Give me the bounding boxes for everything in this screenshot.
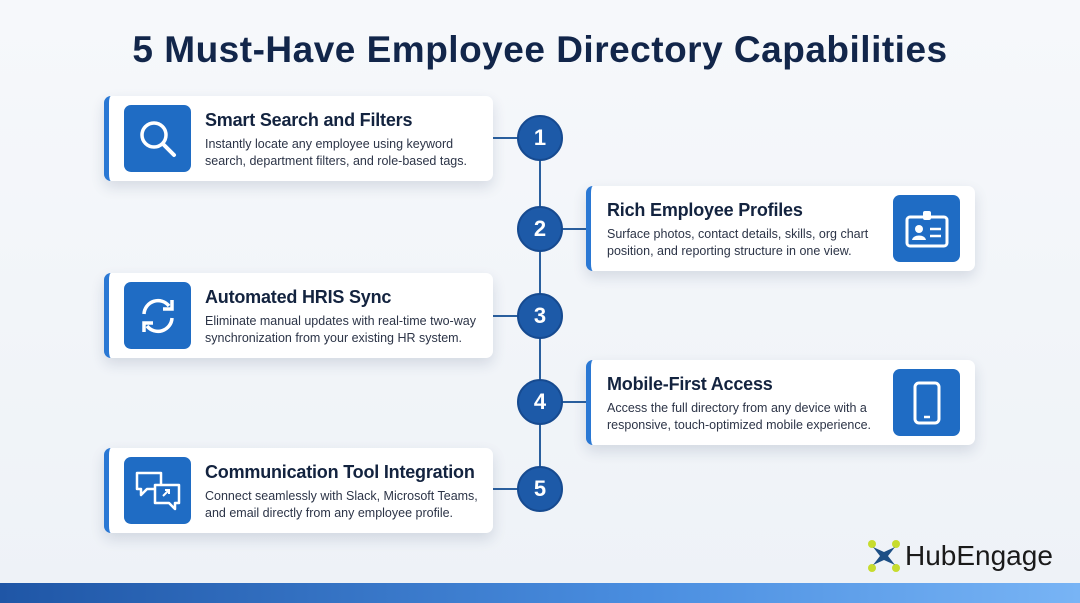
- card 2: rich profiles: position, and reporting structure in one view.: [607, 244, 852, 258]
- card 1: smart search: Instantly locate any employee using keyword: [205, 137, 453, 151]
- step number 1: [517, 115, 563, 161]
- step number 2: 2: [534, 216, 546, 241]
- card 4: mobile first: Mobile-First Access: [607, 374, 773, 394]
- card 1: smart search: [104, 96, 493, 181]
- step number 3: 3: [534, 303, 546, 328]
- card 4: mobile first: responsive, touch-optimized mobile experience.: [607, 418, 871, 432]
- card 1: smart search: search, department filters, and role-based tags.: [205, 154, 467, 168]
- step number 2: [517, 206, 563, 252]
- card 4: mobile first: Access the full directory from any device with a: [607, 401, 867, 415]
- card 1: smart search: Smart Search and Filters: [205, 110, 412, 130]
- step number 5: [517, 466, 563, 512]
- logo: HubEngage: HubEngage: [905, 540, 1053, 571]
- card 2: rich profiles: [586, 186, 975, 271]
- card 3: HRIS sync: synchronization from your existing HR system.: [205, 331, 462, 345]
- card 3: HRIS sync: [104, 273, 493, 358]
- step number 4: 4: [534, 389, 546, 414]
- step number 3: [517, 293, 563, 339]
- step number 4: [517, 379, 563, 425]
- card 5: communication: Communication Tool Integration: [205, 462, 475, 482]
- card 4: mobile first: [586, 360, 975, 445]
- card 5: communication: [104, 448, 493, 533]
- icon: phone: [893, 369, 960, 436]
- icon: sync arrows: [124, 282, 191, 349]
- icon: chat bubbles: [124, 457, 191, 524]
- step number 1: 1: [534, 125, 546, 150]
- icon: magnifier: [124, 105, 191, 172]
- card 2: rich profiles: Surface photos, contact details, skills, org chart: [607, 227, 868, 241]
- card 2: rich profiles: Rich Employee Profiles: [607, 200, 803, 220]
- title: 5 Must-Have Employee Directory Capabilities: [132, 29, 948, 70]
- card 5: communication: Connect seamlessly with Slack, Microsoft Teams,: [205, 489, 478, 503]
- icon: id badge: [893, 195, 960, 262]
- step number 5: 5: [534, 476, 546, 501]
- card 3: HRIS sync: Automated HRIS Sync: [205, 287, 391, 307]
- card 3: HRIS sync: Eliminate manual updates with real-time two-way: [205, 314, 476, 328]
- bottom gradient bar: [0, 583, 1080, 603]
- card 5: communication: and email directly from any employee profile.: [205, 506, 453, 520]
